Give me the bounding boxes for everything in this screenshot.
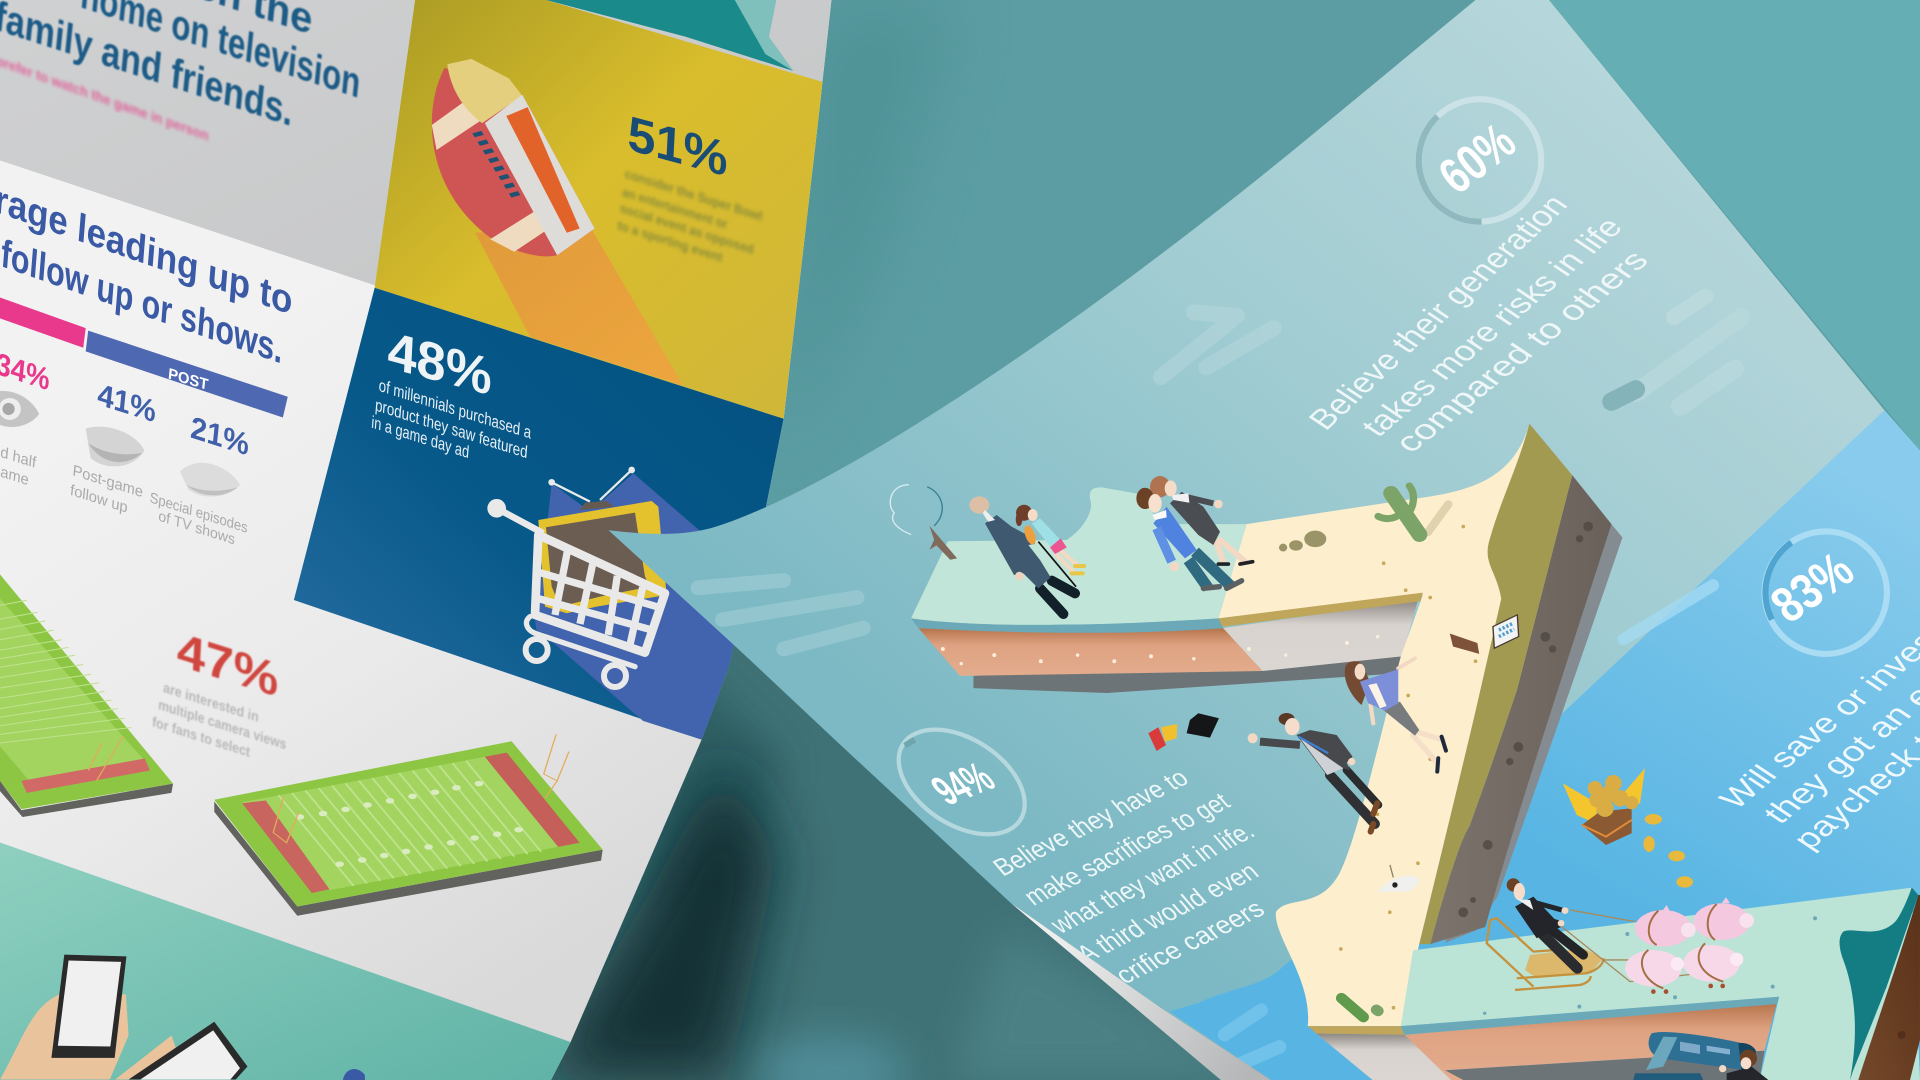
stat: 41% post-game: Post-game: [72, 462, 144, 501]
caption: 60%: Believe their generation: [1301, 188, 1575, 436]
caption: 48%: of millennials purchased a: [378, 375, 532, 443]
people falling from the stem: [1148, 658, 1446, 892]
olive edge of the 7: [1419, 424, 1572, 944]
bottom base: mint top: [1401, 888, 1920, 1080]
savings scene on the base: [1483, 768, 1817, 1015]
panel: yellow 51%: [375, 0, 823, 419]
folded sheet edge: [1010, 902, 1271, 1080]
number 7 landscape: [911, 424, 1920, 1080]
stat: 34% half-time: [0, 354, 49, 484]
icon: hand with phone: [0, 955, 129, 1080]
icon: four piggy banks: [1625, 897, 1754, 994]
stat: 21% special episodes: of TV shows: [158, 508, 236, 549]
stat: 34% half-time: ame: [0, 463, 30, 489]
stat: 21% special episodes: [150, 418, 248, 544]
stat: 34% half-time: d half: [0, 444, 38, 472]
figure: couple: [1136, 476, 1253, 588]
POST bar: POST: [167, 365, 210, 394]
watermark clouds: [698, 296, 1741, 1065]
stat ring: 94%: 94%: [921, 754, 1004, 813]
top teal panel: [546, 0, 793, 71]
icon: shopping cart with TV: [487, 466, 734, 740]
stat: 21% special episodes: Special episodes: [149, 490, 248, 537]
figure: girl: [1016, 505, 1084, 587]
bottom base: brown face: [1316, 1003, 1777, 1080]
stat: 41% post-game: follow up: [69, 482, 128, 517]
mint speckles: [1483, 916, 1817, 1015]
caption: 94%: sacrifice careers: [1086, 895, 1271, 1002]
section heading: coverage: [0, 192, 291, 363]
caption: 94%: [992, 773, 1264, 982]
section heading: coverage: rage leading up to: [0, 176, 294, 324]
caption: 94%: make sacrifices to get: [1018, 788, 1236, 911]
icon: golden sled: [1487, 918, 1603, 990]
caption: 60%: compared to others: [1386, 244, 1656, 458]
panel: blue 48%: [294, 288, 784, 740]
stat: 47% camera views: 47%: [176, 623, 280, 708]
stat ring: 94%: [896, 728, 1027, 836]
icon: fallen cactus: [1341, 998, 1378, 1017]
stat: 21% special episodes: 21%: [189, 410, 251, 463]
icon: second hand with phone: [115, 1022, 248, 1080]
caption: 60%: takes more risks in life: [1353, 211, 1630, 442]
icon: bare tree: [890, 485, 957, 560]
figure: businessman falling: [1248, 713, 1378, 832]
caption: 60%: [1308, 198, 1647, 451]
icon: football popcorn box: [432, 59, 595, 256]
icon: animal skull: [1377, 865, 1419, 892]
icon: football field left: [0, 574, 173, 817]
icon: calendar: [1493, 615, 1519, 648]
icon: falling books: [1148, 724, 1177, 751]
stat ring: 83%: 83%: [1760, 541, 1864, 633]
section heading: coverage: follow up or shows.: [0, 231, 284, 373]
icon: winged treasure chest: [1563, 768, 1645, 845]
rock side of the 7: [1445, 524, 1622, 943]
figure: man riding sled: [1507, 878, 1583, 968]
people on the top arm: [969, 476, 1253, 614]
icon: falling coins: [1643, 814, 1693, 888]
caption: 48%: [372, 381, 531, 458]
caption: 48%: product they saw featured: [374, 394, 528, 462]
caption: 94%: Believe they have to: [988, 764, 1194, 882]
bottom teal band with phones: [0, 842, 571, 1080]
caption: 48%: in a game day ad: [371, 411, 470, 462]
caption: 51%: an entertainment or: [622, 184, 728, 232]
stat: 41% post-game: 41%: [96, 377, 158, 429]
icon: falling black bag: [1187, 713, 1219, 738]
stat: 48%: 48%: [386, 320, 493, 407]
caption: 94%: what they want in life.: [1045, 818, 1261, 939]
soil specks: [941, 635, 1379, 665]
small props on the 7: [890, 485, 1519, 1017]
icon: rocks: [1279, 531, 1326, 551]
caption: 51%: to a sporting event: [617, 217, 724, 265]
figure: woman falling: [1345, 658, 1446, 772]
stat: 51%: 51%: [626, 106, 729, 187]
caption: 51%: consider the Super Bowl: [624, 166, 763, 224]
icon: tow ropes: [1562, 910, 1700, 982]
right poster sheet with curled corner: [588, 0, 1920, 1080]
stat ring: 60%: 60%: [1428, 113, 1526, 204]
icon: football field right: [214, 734, 603, 916]
icon: cactus: [1378, 486, 1448, 535]
pink PRE bar: [0, 298, 86, 348]
cropped blue figure: [343, 1069, 365, 1080]
stat: 41% post-game: [70, 386, 155, 514]
gold inner lip: [1218, 593, 1423, 627]
video camera with operator: [1633, 1032, 1768, 1080]
brown corner: [1858, 895, 1920, 1080]
cream surface: [1218, 424, 1529, 1026]
pink sub line: prefer to watch the game in person: [0, 53, 209, 144]
caption: 51%: social event as opposed: [619, 200, 755, 257]
dark teal corner: [1840, 887, 1920, 1080]
sky blue band: [1169, 410, 1920, 1080]
caption: 51%: [617, 166, 763, 265]
figure: old man with cane: [969, 496, 1075, 614]
caption: 94%: A third would even: [1071, 858, 1265, 968]
stat: 47% camera views: for fans to select: [152, 713, 251, 760]
POST bar: [86, 331, 288, 418]
icon: briefcase: [1450, 634, 1479, 654]
stat: 47% camera views: are interested in: [163, 679, 259, 725]
stat: 47% camera views: multiple camera views: [158, 696, 287, 752]
mint top surface: [911, 487, 1247, 625]
stat: 47% camera views: [152, 636, 286, 758]
stone underside and ledge: [973, 656, 1402, 693]
bottom base: grey strip: [1445, 1051, 1764, 1080]
sand dots: [1339, 525, 1477, 1010]
left poster sheet: [0, 0, 857, 1080]
